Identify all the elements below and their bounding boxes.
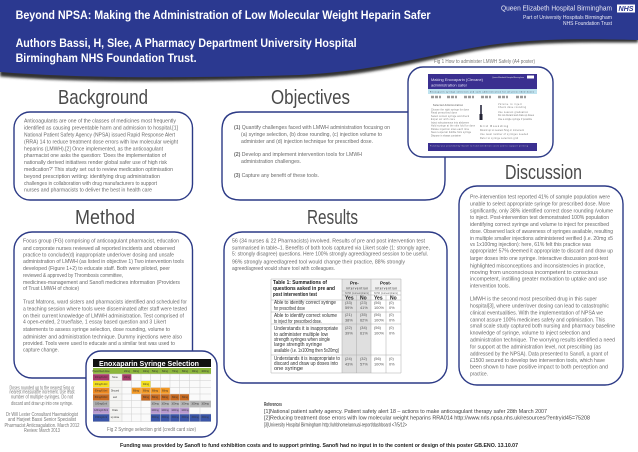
syringe selection grid: 150mg — [201, 416, 209, 419]
miniature poster: administration safer — [431, 82, 468, 88]
discussion text: moving from unconscious incompetent to conscious — [470, 270, 598, 276]
table values: 59% — [345, 305, 353, 310]
objectives list: administer and (d) injection technique for prescribed dose. — [241, 139, 373, 145]
method text — [23, 239, 187, 354]
syringe selection grid: 60mg/0.6ml — [95, 390, 108, 392]
table row labels: strength syringes when single — [274, 337, 330, 343]
background text: medication?' This study set out to review medication optimisation — [24, 167, 173, 173]
syringe selection grid: 50mg — [152, 370, 159, 373]
discussion text: dose. Observed lack of awareness of syringes available, resulting — [470, 229, 613, 235]
miniature poster: Funding was provided by Sanofi to fund exhibition costs and to support printing — [430, 144, 528, 148]
discussion text: significantly, only 38% identified correct dose rounding /volume — [470, 208, 613, 214]
miniature poster: Check dose rounding — [498, 106, 527, 109]
background text: Anticoagulants are one of the classes of medicines most frequently — [24, 119, 176, 125]
panel: results — [224, 207, 447, 383]
table values: (0) — [389, 312, 394, 317]
method text: reviewed & approved by Thrombosis committee, — [23, 273, 123, 279]
side note: dose rounding and credits: Pharmacist Anticoagulation. March 2012 — [4, 423, 80, 429]
background text: identified as causing preventable harm and admission to hospital.[1] — [24, 126, 178, 132]
miniature poster: Rotate injection sites each time — [431, 128, 470, 131]
objectives list: (a) syringe selection, (b) dose rounding, (c) injection volume to — [241, 132, 382, 138]
figure 1 caption: Fig 1 How to administer LMWH Safely (A4 poster) — [434, 59, 535, 65]
syringe selection grid: 80mg — [182, 370, 189, 373]
miniature poster: Use a single syringe if possible — [498, 118, 533, 121]
table values: 41% — [360, 305, 368, 310]
hospital name: Part of University Hospitals Birmingham — [523, 15, 612, 21]
table values: (23) — [360, 300, 368, 305]
method text: developed (Figure 1+2) to educate staff. Both were piloted, peer — [23, 266, 170, 272]
table column headers — [345, 280, 398, 302]
background text: nationally derived initiatives render global safer use of high risk — [24, 160, 167, 166]
objectives list: (1) Quantify challenges faced with LMWH administration focusing on — [234, 125, 390, 131]
syringe selection grid: 20mg — [124, 376, 131, 379]
syringe selection grid: Prescribed dose — [92, 370, 110, 373]
syringe selection grid: 60mg — [152, 390, 159, 392]
syringe selection grid: 150mg — [171, 416, 179, 419]
heading: objectives: Objectives — [271, 87, 350, 109]
syringe selection grid — [92, 368, 211, 422]
table 1: summations of questions — [271, 279, 401, 373]
miniature poster: Do not discard and draw up doses — [498, 114, 535, 117]
table values: (0) — [389, 300, 394, 305]
miniature poster: Round up to nearest 5mg or increment — [480, 129, 524, 132]
table values: 57% — [360, 362, 368, 366]
discussion text: clinical eventualities. With the implementation of NPSA we — [470, 311, 603, 317]
objectives border — [222, 112, 445, 200]
method text: a teaching session where tools were disseminated after staff were tested — [23, 307, 187, 313]
panel: method — [14, 207, 192, 378]
syringe selection grid: 30mg — [133, 370, 140, 373]
hospital name: Queen Elizabeth Hospital Birmingham — [501, 6, 612, 12]
table values: (22) — [345, 325, 353, 330]
background text: (RRA) 14 to reduce treatment dose errors with low molecular weight — [24, 139, 178, 145]
syringe selection grid: 80mg/0.8ml — [95, 396, 108, 399]
table values: 0% — [389, 305, 395, 310]
discussion text: practice. — [470, 372, 488, 378]
table title — [273, 280, 335, 298]
table values: (21) — [345, 312, 353, 317]
results text: 56 (34 nurses & 22 Pharmacists) involved. Results of pre and post intervention test — [232, 239, 425, 245]
table title: questions asked in pre and — [273, 286, 335, 292]
syringe selection grid: 40mg — [143, 383, 150, 386]
miniature poster: Volume to inject — [498, 103, 522, 106]
syringe selection grid: 60mg — [162, 390, 169, 392]
syringe selection grid: 40mg/0.4ml — [95, 383, 108, 386]
table row labels: for prescribed dose — [274, 306, 305, 312]
table values: (0) — [389, 356, 394, 361]
miniature poster: Select correct syringe and check — [431, 115, 470, 118]
method text: Trust Matrons, ward sisters and pharmacists identified and scheduled for — [23, 299, 187, 305]
authors: Birmingham NHS Foundation Trust. — [16, 53, 197, 65]
method text: practice to conclude(d) inappropriate under/over dosing and unsafe — [23, 253, 174, 259]
discussion text: been shown to have positive impact to both perception and — [470, 364, 608, 370]
syringe selection grid: 120mg — [151, 409, 159, 412]
method border — [14, 232, 192, 378]
funding statement: Funding was provided by Sanofi to fund exhibition costs and to support printing. Sanofi had no input in to the content or design of this poster GB.ENO. 13.10.07 — [120, 443, 518, 449]
syringe selection grid: 20mg/0.2ml — [95, 376, 108, 379]
syringe selection grid: 100mg — [161, 402, 169, 406]
syringe selection grid: 20mg — [124, 370, 131, 373]
icon: NHS logo: NHS — [618, 4, 634, 13]
miniature poster: Choose the right syringe for dose — [431, 108, 470, 112]
method text: 4 open-ended, 2 true/false, 1 essay based question and 3 Likert — [23, 320, 166, 326]
table values — [345, 300, 395, 366]
objectives list: administration challenges. — [241, 159, 301, 165]
syringe selection grid: 80mg — [152, 396, 159, 399]
discussion text: to inject. Post-intervention test demonstrated 100% population — [470, 215, 609, 221]
method text: capture change. — [23, 348, 59, 354]
syringe selection grid: 60mg — [133, 390, 140, 392]
syringe selection grid: 100mg — [201, 370, 209, 373]
authors — [16, 38, 357, 65]
results border — [224, 232, 447, 383]
hospital name — [501, 6, 613, 27]
results text: 5: strongly disagree) questions. Here 100% strongly agreed/agreed session to be useful. — [232, 252, 428, 258]
panel: objectives — [222, 87, 445, 200]
syringe selection grid: 60mg — [162, 370, 169, 373]
miniature poster: Enoxaparin syringe selection and safe administration for all prescribed doses — [430, 90, 534, 94]
miniature poster: Selected Administration — [433, 104, 464, 107]
miniature poster: Dispose in sharps container — [431, 134, 461, 138]
syringe selection grid: 100mg — [191, 402, 199, 406]
table column headers: N=56 (nurses/pharm) — [345, 292, 369, 295]
syringe selection grid: 120mg — [181, 409, 189, 412]
table values: (56) — [374, 356, 382, 361]
miniature poster: Hold syringe at the skin fold for dose — [431, 124, 476, 128]
table row labels: one syringe — [274, 366, 303, 372]
miniature poster: Making Enoxaparin (Clexane) — [431, 77, 484, 82]
heading: results: Results — [307, 207, 358, 229]
objectives list: (3) Capture any benefit of these tools. — [234, 173, 319, 179]
table values: (56) — [374, 300, 382, 305]
syringe selection grid: Draw — [112, 409, 118, 412]
table column headers: intervention — [375, 286, 397, 290]
miniature poster: Expel air with care — [431, 118, 456, 121]
panel: discussion — [459, 162, 623, 385]
grid title bar: Enoxaparin Syringe Selection — [99, 359, 199, 368]
hospital name: NHS Foundation Trust — [563, 21, 613, 27]
side note: dose rounding and credits: and Harjeet Bassi Senior Specialist — [8, 417, 77, 423]
method text: administer and administration technique. Dummy injections were also — [23, 334, 182, 340]
miniature poster: Inject subcutaneous into abdomen — [431, 122, 470, 124]
syringe selection grid: 100mg — [181, 402, 189, 406]
discussion text: knowledge of syringe, volume to inject selection and — [470, 330, 590, 336]
discussion text: in multiple smaller injections administered verified (i.e. 20mg x5 — [470, 236, 613, 242]
syringe selection grid: 150mg/1ml — [95, 416, 107, 419]
figure 1 border — [408, 67, 553, 157]
table row labels — [274, 300, 340, 372]
table values: (33) — [345, 300, 353, 305]
background text: pharmacist one asks the question: 'Does the implementation of — [24, 153, 166, 159]
table row labels: large strength syringe — [274, 342, 322, 348]
table values: (35) — [360, 312, 368, 317]
table values: 0% — [389, 330, 395, 336]
syringe selection grid: 100mg/1ml — [95, 402, 107, 406]
table values: 0% — [389, 362, 395, 366]
table row labels: to administer multiple low — [274, 332, 328, 338]
miniature poster: Queen Elizabeth Hospital Birmingham — [492, 76, 524, 79]
discussion text: intervention tools. — [470, 284, 510, 290]
syringe selection grid: 120mg — [171, 409, 179, 412]
discussion text: for support at the administration level, not prescribing (as — [470, 344, 601, 350]
table column headers: N=56 (nurses/pharm) — [374, 292, 398, 295]
syringe selection grid: 80mg — [162, 396, 169, 399]
references: [1]National patient safety agency. Patient safety alert 18 – actions to make anticoagulant therapy safer 28th March 2007 — [264, 409, 547, 415]
discussion text — [470, 194, 615, 378]
discussion text: highlighted misconceptions and inconsistencies in practice, — [470, 263, 605, 269]
table column headers: Pre- — [350, 280, 359, 286]
background text: National Patient Safety Agency (NPSA) issued Rapid Response Alert — [24, 132, 175, 138]
side note: dose rounding and credits: Doses rounded up to the nearest 5mg or — [10, 386, 75, 392]
table values: (32) — [360, 356, 368, 361]
background text — [24, 119, 178, 194]
method text: medicines-management and Sanofi medicines information (Providers — [23, 280, 180, 286]
syringe selection grid: 150mg — [181, 416, 189, 419]
table values: 62% — [360, 318, 368, 322]
table values: 100% — [374, 362, 384, 366]
side note: dose rounding and credits: number of multiple syringes. Do not — [11, 394, 73, 400]
figure 2 caption: Fig 2 Syringe selection grid (credit card size) — [107, 427, 196, 433]
header banner — [0, 0, 638, 81]
side note: dose rounding and credits: Review: March 2013 — [24, 428, 60, 434]
syringe selection grid: 80mg — [182, 396, 189, 399]
table values: 100% — [374, 305, 384, 310]
method text: and corporate nurses reviewed all reported incidents and observed — [23, 246, 175, 252]
table title: post intervention test — [273, 292, 317, 298]
table title: Table 1: Summations of — [273, 280, 327, 286]
discussion text: small scale study captured both nursing and pharmacy baseline — [470, 324, 615, 330]
miniature poster: Never expel air bubble from syringe — [431, 131, 472, 134]
syringe selection grid: 150mg — [191, 416, 199, 419]
background text: challenges in collaboration with drug manufacturers to support — [24, 181, 157, 187]
syringe selection grid: 150mg — [161, 416, 169, 419]
syringe selection grid: 150mg — [151, 416, 159, 419]
table column headers: Post- — [380, 280, 392, 286]
heading: method: Method — [75, 207, 135, 229]
syringe selection grid: 120mg/0.8ml — [94, 409, 108, 412]
figure 1: A4 poster — [408, 59, 553, 157]
discussion text: hospital[3], where under/over dosing can lead to catastrophic — [470, 304, 609, 310]
table values: 38% — [345, 318, 353, 322]
method text: administration of LMWH (as listed in objective 1) Two intervention tools — [23, 259, 184, 265]
miniature poster: Use nearest graduation — [498, 111, 529, 114]
method text: statements to assess syringe selection, dose rounding, volume to — [23, 327, 170, 333]
discussion border — [459, 186, 623, 385]
syringe selection grid: 100mg — [201, 402, 209, 406]
table values: 43% — [345, 362, 353, 366]
discussion text: larger doses into one syringe. Interactive discussion post-test — [470, 256, 608, 262]
objectives list — [234, 125, 390, 179]
method text: of Trust LMWH of choice) — [23, 286, 79, 292]
discussion text: £1500 secured to develop two intervention tools, which have — [470, 358, 605, 364]
miniature poster: Refer to syringe selection grid — [480, 137, 519, 140]
table row labels: to inject for prescribed dose. — [274, 319, 322, 325]
background text: beyond prescription writing: identifying drug administration — [24, 174, 160, 180]
results text: 96% strongly agreed/agreed tool would change their practice, 88% strongly — [232, 259, 405, 265]
discussion text: administration technique. The worrying results identified a need — [470, 337, 615, 343]
miniature poster: Read prescribed dose — [431, 112, 458, 114]
discussion text: appropriate! 57% deemed it appropriate to discard and draw up — [470, 249, 613, 255]
figure 2: enoxaparin syringe selection grid — [86, 351, 217, 437]
discussion text: cannot assure 100% medicines safety and optimisation. This — [470, 318, 605, 324]
table values: 39% — [345, 330, 353, 336]
figure 2 border — [86, 351, 217, 437]
table row labels: Understands it is inappropriate to — [274, 356, 340, 362]
syringe selection grid: 70mg — [172, 370, 179, 373]
table values: (34) — [360, 325, 368, 330]
discussion text: vs 1x100mg injection): here, 61% felt this practice was — [470, 242, 591, 248]
results text — [232, 239, 430, 272]
references: [2]Reducing treatment dose errors with low molecular weight heparins RRA014 http://www.nrls.npsa.nhs.uk/resources/?entryid45=75208 — [264, 416, 590, 422]
method text: provided. Tools were used to educate and a similar test was used to — [23, 341, 175, 347]
heading: discussion: Discussion — [505, 162, 582, 184]
background text: heparins (LMWH).[2] Once implemented, as the anticoagulant — [24, 146, 163, 152]
method text: Focus group (FG) comprising of anticoagulant pharmacist, education — [23, 239, 179, 245]
background border — [14, 112, 192, 200]
method text: on their current knowledge of LMWH administration. Test comprised of — [23, 313, 184, 319]
syringe selection grid: None — [112, 376, 119, 379]
table column headers: intervention — [346, 286, 368, 290]
side note: dose rounding and credits — [4, 386, 80, 434]
poster title: Beyond NPSA: Making the Administration of Low Molecular Weight Heparin Safer — [16, 10, 431, 22]
objectives list: (2) Develop and implement intervention tools for LMWH — [234, 152, 362, 158]
syringe selection grid: Discard — [111, 390, 120, 392]
table column headers: No — [360, 296, 367, 302]
miniature poster: Use least number of syringes needed — [480, 133, 529, 136]
syringe selection grid: 100mg — [171, 402, 179, 406]
syringe selection grid: 80mg — [143, 396, 150, 399]
discussion text: unable to select appropriate syringe for prescribed dose. More — [470, 201, 610, 207]
table column headers: No — [390, 296, 397, 302]
table row labels: Understands it is inappropriate — [274, 326, 338, 332]
side note: dose rounding and credits: discard and draw up into one syringe. — [11, 401, 73, 407]
table values: (24) — [345, 356, 353, 361]
syringe selection grid: 120mg — [161, 409, 169, 412]
references: [3]University Hospital Birmingham http://uhbhome/annual-report/dashboard <7/5/12> — [264, 422, 407, 428]
discussion text: Pre-intervention test reported 41% of sample population were — [470, 194, 610, 200]
results text: summarised in table–1. Benefits of both tools captured via Likert scale (1: strongly agree, — [232, 245, 430, 251]
discussion text: LMWH is the second most prescribed drug in this super — [470, 297, 597, 303]
syringe selection grid: 100mg — [151, 402, 159, 406]
syringe selection grid: 90mg — [192, 370, 199, 373]
syringe selection grid: 40mg — [143, 370, 150, 373]
side note: dose rounding and credits: nearest measurable increment. Use least — [10, 390, 75, 396]
table column headers: Yes — [345, 296, 354, 302]
side note: dose rounding and credits: Dr Will Lester Consultant Haematologist — [6, 412, 78, 418]
discussion text: incompetent, instilling greater motivation to uptake and use — [470, 277, 607, 283]
table row labels: Able to identify correct syringe — [274, 300, 336, 306]
references: References — [264, 402, 282, 408]
panel: background — [14, 87, 192, 200]
table values: (0) — [389, 325, 394, 330]
background text: nurses and pharmacists to deliver the best in health care — [24, 188, 152, 194]
table column headers: Yes — [374, 296, 383, 302]
miniature poster — [428, 74, 537, 151]
table values: 100% — [374, 318, 384, 322]
table row labels: discard and draw up doses into — [274, 361, 338, 367]
discussion text: addressed by the NPSA). Data presented to Sanofi, a grant of — [470, 351, 608, 357]
table values: 100% — [374, 330, 384, 336]
table values: 61% — [360, 330, 368, 336]
table values: (56) — [374, 325, 382, 330]
table row labels: available (i.e. 1x100mg then 5x20mg) — [274, 348, 339, 354]
syringe selection grid: up dose — [111, 416, 120, 419]
syringe selection grid: 80mg — [172, 396, 179, 399]
table values: 0% — [389, 318, 395, 322]
table row labels: Able to identify correct volume — [274, 313, 337, 319]
discussion text: identifying correct syringe and volume to inject for prescribed — [470, 222, 609, 228]
table values: (56) — [374, 312, 382, 317]
references — [264, 402, 590, 428]
heading: background: Background — [58, 87, 148, 109]
results text: agreed/agreed would share tool with colleagues. — [232, 266, 335, 272]
syringe selection grid: and — [113, 396, 118, 399]
authors: Authors Bassi, H, Slee, A Pharmacy Department University Hospital — [16, 38, 357, 50]
miniature poster: Grid Rounding — [480, 126, 509, 128]
syringe selection grid: 60mg — [143, 390, 150, 392]
